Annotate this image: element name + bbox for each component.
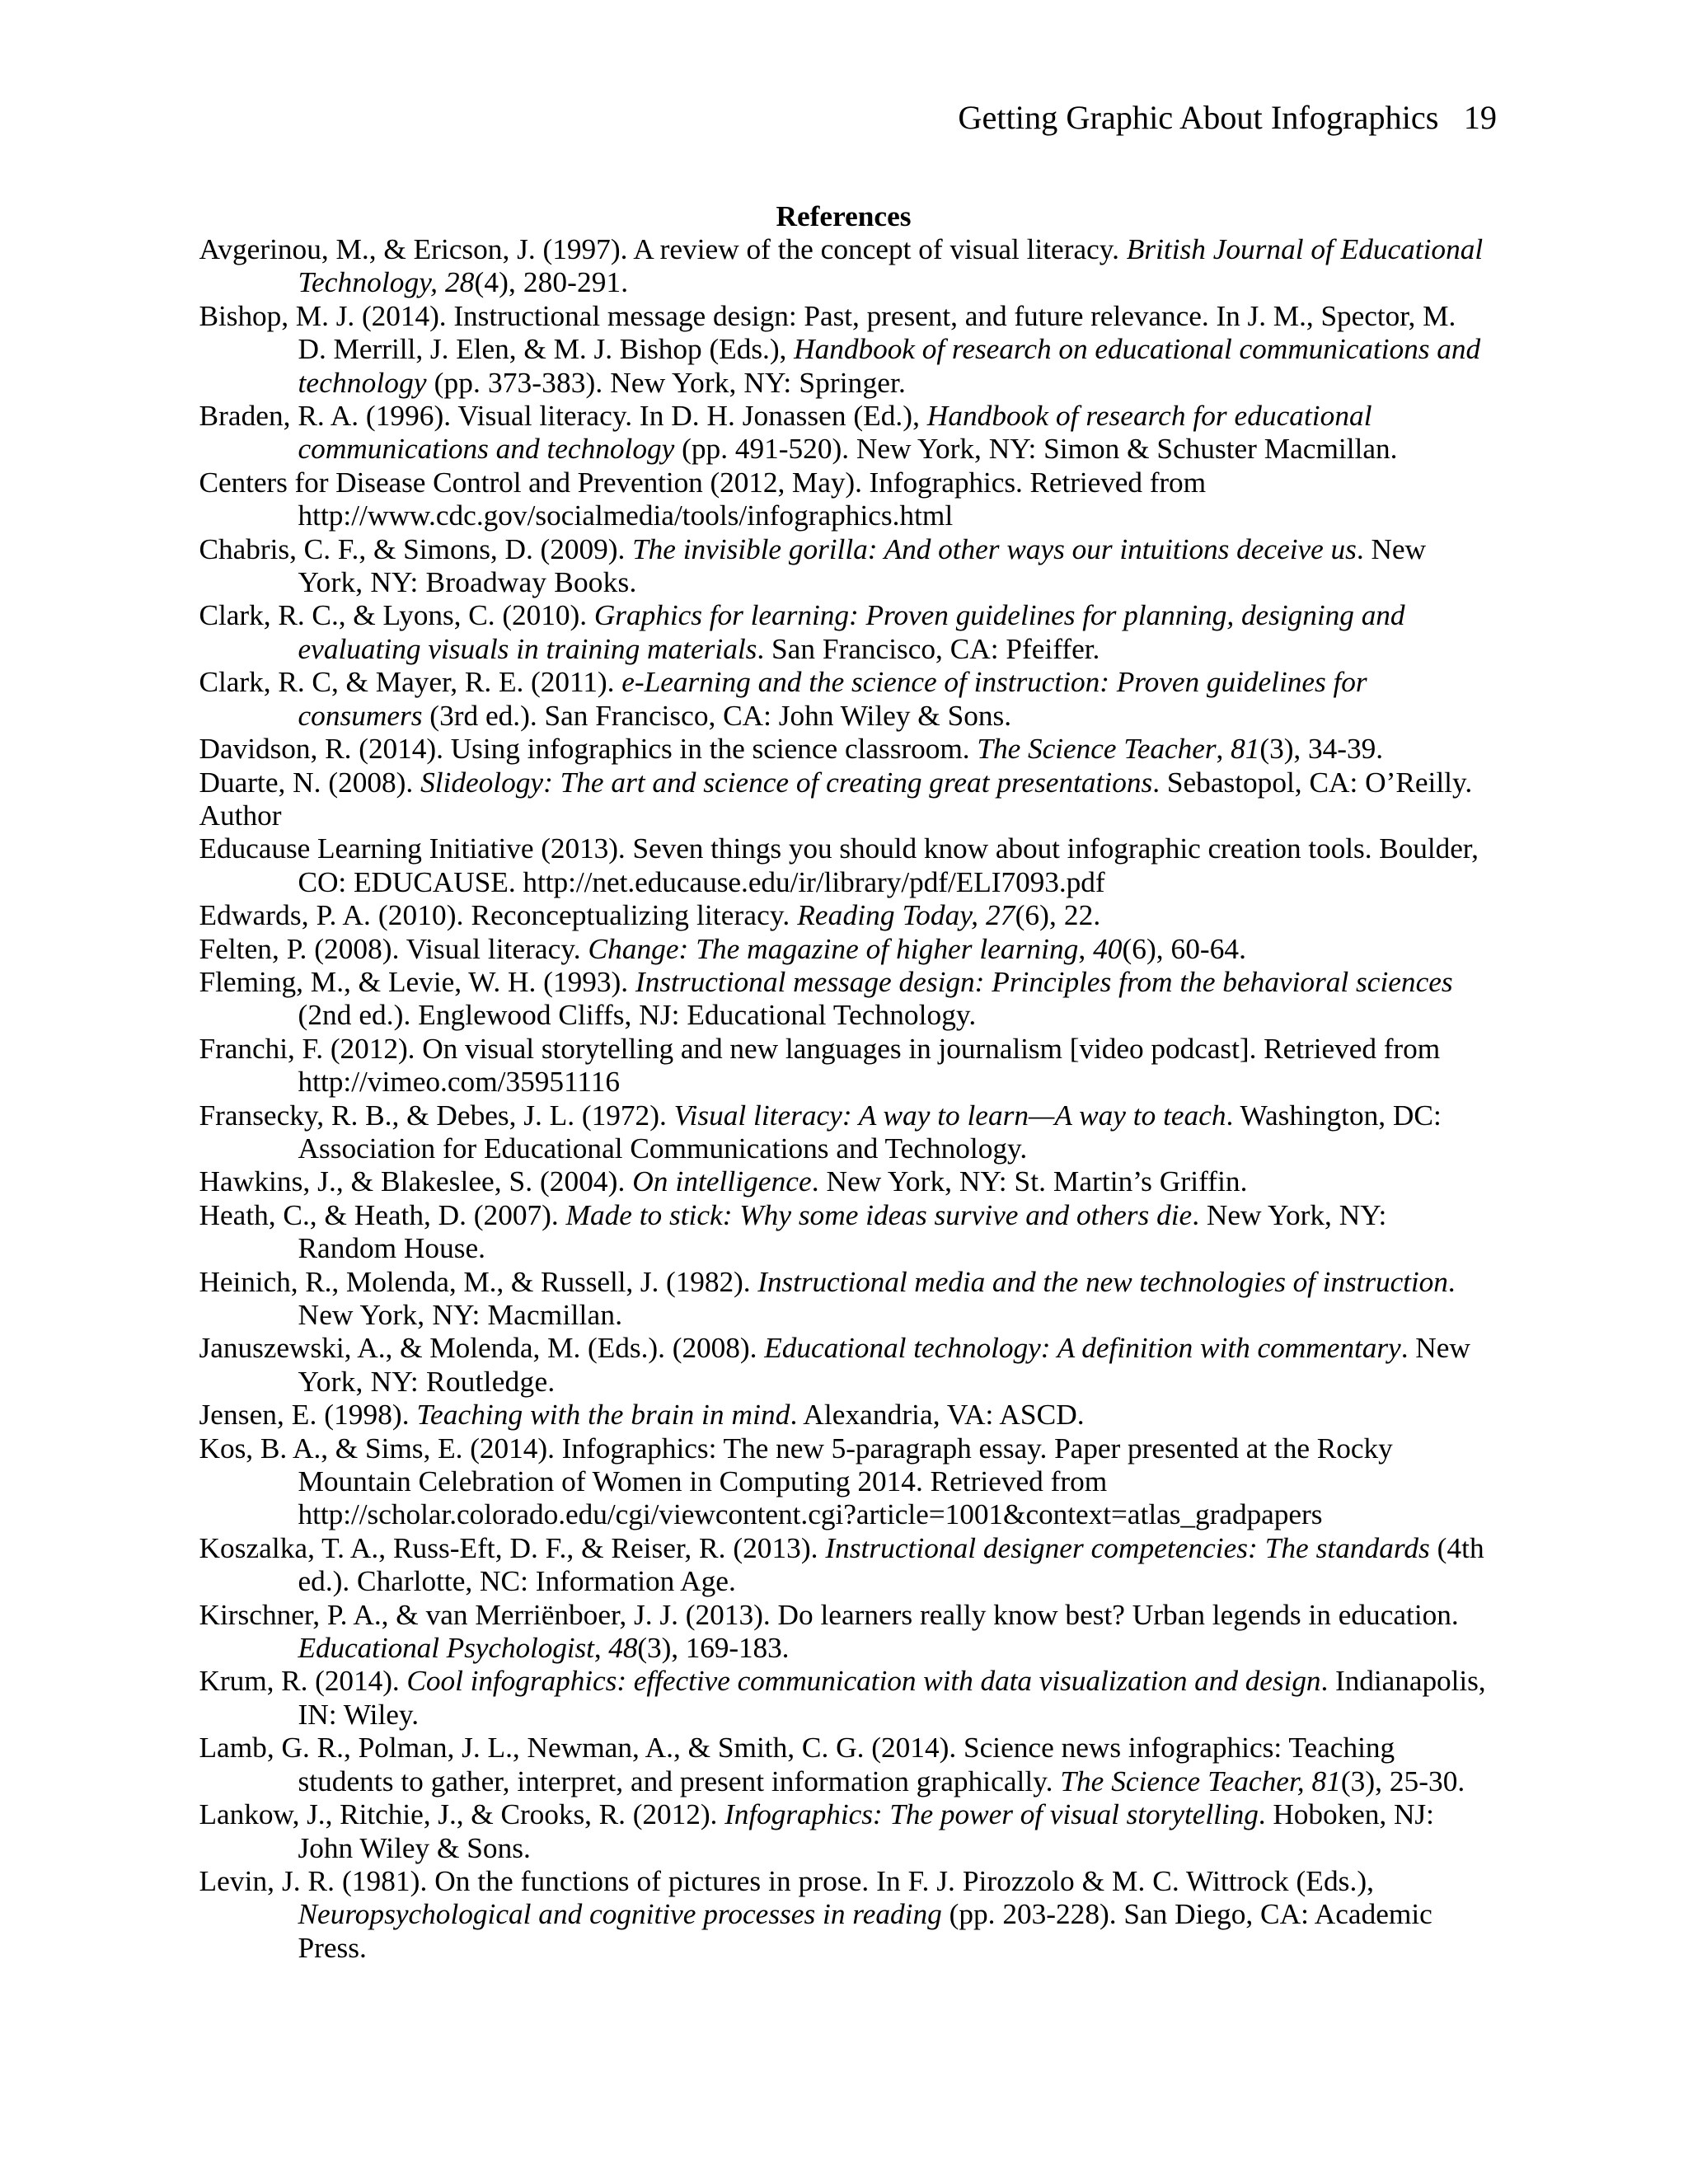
reference: Lankow: Lankow, J., Ritchie, J., & Crooks, R. (2012). Infographics: The power of visual storytelling. Hoboken, NJ: [199,1798,1434,1830]
reference: Clark and Lyons: evaluating visuals in training materials. San Francisco, CA: Pfeiffer. [298,633,1100,665]
reference: Felten: Felten, P. (2008). Visual literacy. Change: The magazine of higher learning, 40(6), 60-64. [199,933,1246,965]
reference: Koszalka: Koszalka, T. A., Russ-Eft, D. F., & Reiser, R. (2013). Instructional designer competencies: The standards (4th [199,1532,1484,1564]
reference: Educause: Educause Learning Initiative (2013). Seven things you should know about infographic creation tools. Boulder, [199,832,1479,865]
reference: Chabris [199,533,1426,598]
reference: Krum: Krum, R. (2014). Cool infographics: effective communication with data visualization and design. Indianapolis, [199,1665,1486,1697]
reference: Januszewski [199,1332,1470,1398]
reference list [199,233,1486,1964]
reference: Fransecky: Fransecky, R. B., & Debes, J. L. (1972). Visual literacy: A way to learn—A way to teach. Washington, DC: [199,1099,1442,1132]
reference: Bishop: Bishop, M. J. (2014). Instructional message design: Past, present, and future relevance. In J. M., Spector, M. [199,300,1456,332]
reference: Clark and Mayer [199,666,1367,732]
reference: Avgerinou [199,233,1483,298]
reference: Braden: Braden, R. A. (1996). Visual literacy. In D. H. Jonassen (Ed.), Handbook of research for educational [199,400,1372,432]
reference: Krum: IN: Wiley. [298,1699,419,1731]
reference: Januszewski: York, NY: Routledge. [298,1366,555,1398]
reference: Fleming: Fleming, M., & Levie, W. H. (1993). Instructional message design: Principles from the behavioral sciences [199,966,1453,998]
reference: Franchi [199,1033,1440,1098]
reference: Fransecky: Association for Educational Communications and Technology. [298,1132,1027,1165]
reference: Krum [199,1665,1486,1731]
reference: Heinich [199,1266,1456,1331]
reference: Kirschner: Educational Psychologist, 48(3), 169-183. [298,1632,789,1664]
reference: Kos: Mountain Celebration of Women in Computing 2014. Retrieved from [298,1465,1107,1497]
reference: Educause: CO: EDUCAUSE. http://net.educause.edu/ir/library/pdf/ELI7093.pdf [298,866,1105,898]
reference: Educause [199,832,1479,898]
reference: Heath: Heath, C., & Heath, D. (2007). Made to stick: Why some ideas survive and others die. New York, NY: [199,1199,1386,1231]
reference: Lamb: students to gather, interpret, and present information graphically. The Science Teacher, 81(3), 25-30. [298,1765,1465,1797]
reference: Levin: Levin, J. R. (1981). On the functions of pictures in prose. In F. J. Pirozzolo & M. C. Wittrock (Eds.), [199,1865,1374,1897]
reference: Kos: http://scholar.colorado.edu/cgi/viewcontent.cgi?article=1001&context=atlas_gradpapers [298,1498,1322,1530]
reference: Franchi: http://vimeo.com/35951116 [298,1066,620,1098]
reference: Chabris: York, NY: Broadway Books. [298,566,636,598]
running header: title and page number: Getting Graphic About Infographics 19 [958,99,1497,136]
reference: Fransecky [199,1099,1442,1165]
reference: Clark and Mayer: Clark, R. C, & Mayer, R. E. (2011). e-Learning and the science of instruction: Proven guidelines for [199,666,1367,698]
reference: Kirschner [199,1599,1459,1664]
reference: Bishop [199,300,1480,399]
reference: Fleming [199,966,1453,1031]
reference: Avgerinou: Technology, 28(4), 280-291. [298,266,628,298]
reference: Heath [199,1199,1386,1264]
reference: Duarte: Duarte, N. (2008). Slideology: The art and science of creating great presentations. Sebastopol, CA: O’Reilly. [199,766,1472,798]
reference: Avgerinou: Avgerinou, M., & Ericson, J. (1997). A review of the concept of visual literacy. British Journal of Educational [199,233,1483,265]
reference: Levin: Press. [298,1932,367,1964]
reference: Edwards: Edwards, P. A. (2010). Reconceptualizing literacy. Reading Today, 27(6), 22. [199,899,1100,931]
reference: Lankow: John Wiley & Sons. [298,1831,531,1864]
heading: References: References [776,200,911,232]
reference: Centers for Disease Control [199,466,1206,532]
reference: Davidson: Davidson, R. (2014). Using infographics in the science classroom. The Science Teacher, 81(3), 34-39. [199,733,1383,765]
reference: Chabris: Chabris, C. F., & Simons, D. (2009). The invisible gorilla: And other ways our intuitions deceive us. New [199,533,1426,565]
reference: Clark and Lyons [199,599,1405,665]
reference: Centers for Disease Control: Centers for Disease Control and Prevention (2012, May). Infographics. Retrieved from [199,466,1206,499]
reference: Lamb [199,1732,1465,1797]
reference: Braden [199,400,1397,465]
reference: Bishop: technology (pp. 373-383). New York, NY: Springer. [298,367,906,399]
reference: Koszalka [199,1532,1484,1597]
reference: Duarte [199,766,1472,832]
reference: Jensen: Jensen, E. (1998). Teaching with the brain in mind. Alexandria, VA: ASCD. [199,1399,1085,1431]
reference: Levin [199,1865,1432,1964]
reference: Lamb: Lamb, G. R., Polman, J. L., Newman, A., & Smith, C. G. (2014). Science news infographics: Teaching [199,1732,1395,1764]
reference: Kos [199,1432,1393,1530]
reference: Centers for Disease Control: http://www.cdc.gov/socialmedia/tools/infographics.html [298,499,953,532]
reference: Hawkins: Hawkins, J., & Blakeslee, S. (2004). On intelligence. New York, NY: St. Martin’s Griffin. [199,1165,1248,1197]
reference: Clark and Mayer: consumers (3rd ed.). San Francisco, CA: John Wiley & Sons. [298,700,1011,732]
reference: Duarte: Author [199,799,282,832]
reference: Heinich: New York, NY: Macmillan. [298,1299,622,1331]
reference: Levin: Neuropsychological and cognitive processes in reading (pp. 203-228). San Diego, CA: Academic [298,1898,1432,1930]
reference: Koszalka: ed.). Charlotte, NC: Information Age. [298,1565,736,1597]
reference: Bishop: D. Merrill, J. Elen, & M. J. Bishop (Eds.), Handbook of research on educational communications and [298,333,1480,365]
reference: Kirschner: Kirschner, P. A., & van Merriënboer, J. J. (2013). Do learners really know best? Urban legends in education. [199,1599,1459,1631]
reference: Braden: communications and technology (pp. 491-520). New York, NY: Simon & Schuster Macmillan. [298,433,1397,465]
reference: Kos: Kos, B. A., & Sims, E. (2014). Infographics: The new 5-paragraph essay. Paper presented at the Rocky [199,1432,1393,1465]
reference: Heath: Random House. [298,1232,485,1264]
reference: Januszewski: Januszewski, A., & Molenda, M. (Eds.). (2008). Educational technology: A definition with commentary. New [199,1332,1470,1364]
reference: Fleming: (2nd ed.). Englewood Cliffs, NJ: Educational Technology. [298,999,976,1031]
reference: Franchi: Franchi, F. (2012). On visual storytelling and new languages in journalism [video podcast]. Retrieved from [199,1033,1440,1065]
reference: Lankow [199,1798,1434,1864]
reference: Heinich: Heinich, R., Molenda, M., & Russell, J. (1982). Instructional media and the new technologies of instruction. [199,1266,1456,1298]
reference: Clark and Lyons: Clark, R. C., & Lyons, C. (2010). Graphics for learning: Proven guidelines for planning, designing and [199,599,1405,631]
